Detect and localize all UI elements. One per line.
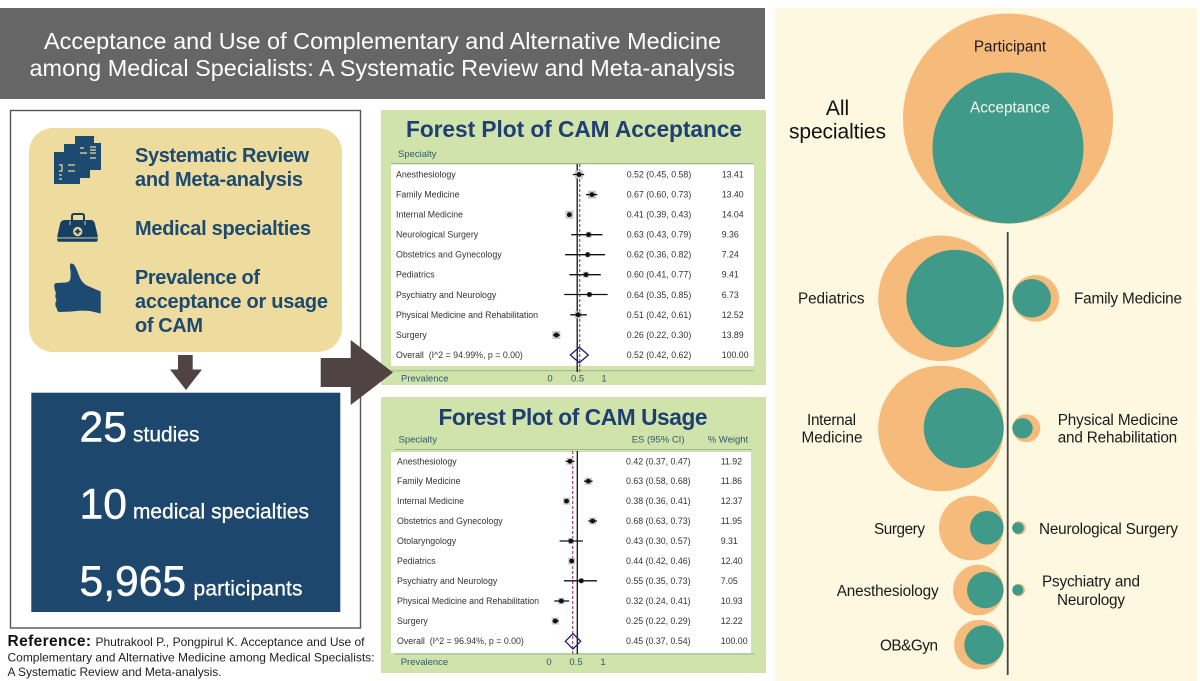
row: Anesthesiology: [397, 456, 742, 466]
row: Overall: [397, 634, 748, 649]
chart: psychiatry and neurology: Neurology: [1057, 592, 1125, 609]
row: Overall: Overall (I^2 = 96.94%, p = 0.00): [397, 636, 524, 646]
row: Psychiatry and Neurology: 6.73: [722, 290, 739, 300]
chart: psychiatry and neurology: [1012, 574, 1140, 609]
row: Obstetrics and Gynecology: [396, 250, 739, 260]
row: Overall: 100.00: [721, 636, 748, 646]
row: Obstetrics and Gynecology: 11.95: [721, 516, 742, 526]
row: Pediatrics: 0.44 (0.42, 0.46): [626, 556, 691, 566]
row: Overall: 100.00: [722, 350, 749, 360]
chart: obstetrics and gynecology: OB&Gyn: [880, 638, 938, 655]
row: Family Medicine: 0.63 (0.58, 0.68): [626, 476, 691, 486]
row: Internal Medicine: 12.37: [721, 496, 743, 506]
row: Anesthesiology: [396, 170, 744, 180]
reference lines: [577, 164, 580, 372]
chart: psychiatry and neurology: Psychiatry and: [1042, 574, 1140, 591]
stat: studies: studies: [133, 424, 200, 447]
row: Anesthesiology: Anesthesiology: [396, 170, 456, 180]
chart: all specialties: Acceptance: [970, 100, 1050, 117]
row: Anesthesiology: 11.92: [721, 456, 742, 466]
chart: internal medicine: [802, 366, 1004, 491]
chart: physical medicine and rehabilitation: [1012, 412, 1178, 446]
panel: forest plot of CAM acceptance: [381, 110, 766, 385]
row: Internal Medicine: 0.38 (0.36, 0.41): [626, 496, 691, 506]
icon: thumbs up: [54, 263, 101, 314]
row: Family Medicine: Family Medicine: [396, 190, 460, 200]
axis: prevalence: Prevalence: [401, 657, 448, 668]
row: Physical Medicine and Rehabilitation: 0.32 (0.24, 0.41): [626, 596, 691, 606]
row: Physical Medicine and Rehabilitation: 0.51 (0.42, 0.61): [627, 310, 691, 320]
row: Psychiatry and Neurology: 0.55 (0.35, 0.73): [626, 576, 691, 586]
chart: all specialties: Participant: [974, 39, 1047, 56]
divider: [1007, 232, 1009, 675]
chart: neurological surgery: Neurological Surgery: [1039, 521, 1178, 538]
row: Psychiatry and Neurology: [397, 576, 738, 586]
row: Family Medicine: Family Medicine: [397, 476, 461, 486]
chart: family medicine: [1012, 275, 1182, 322]
row: Physical Medicine and Rehabilitation: Physical Medicine and Rehabilitation: [397, 596, 539, 606]
stat: participants: participants: [194, 578, 302, 601]
text: reference: [8, 633, 374, 679]
arrow: down to study counts: [170, 355, 202, 390]
chart: surgery: Surgery: [874, 521, 925, 538]
row: Pediatrics: Pediatrics: [396, 270, 435, 280]
axis: prevalence: 0: [546, 657, 552, 668]
row: Pediatrics: [396, 270, 739, 280]
column headers: Specialty: [398, 435, 437, 446]
row: Internal Medicine: 14.04: [722, 210, 744, 220]
row: Obstetrics and Gynecology: 0.62 (0.36, 0.82): [627, 250, 691, 260]
reference lines: [573, 451, 577, 654]
stat: medical specialties: 10: [80, 480, 127, 528]
axis: prevalence: 1: [600, 657, 606, 668]
row: Otolaryngology: Otolaryngology: [397, 536, 457, 546]
text: reference: Complementary and Alternative Medicine among Medical Specialists:: [8, 651, 374, 665]
stat: studies: [80, 404, 200, 452]
row: Internal Medicine: [396, 210, 744, 220]
row: Psychiatry and Neurology: [396, 290, 739, 300]
text: prevalence of acceptance or usage: Prevalence of: [135, 267, 260, 289]
row: Internal Medicine: Internal Medicine: [397, 496, 464, 506]
heading: usage: Forest Plot of CAM Usage: [438, 404, 708, 430]
row: Surgery: Surgery: [397, 616, 428, 626]
icon: documents: [54, 136, 101, 184]
axis: prevalence: [401, 374, 607, 385]
row: Otolaryngology: 9.31: [721, 536, 738, 546]
stat: participants: [80, 558, 302, 606]
text: systematic review: [135, 145, 309, 191]
row: Physical Medicine and Rehabilitation: Physical Medicine and Rehabilitation: [396, 310, 538, 320]
chart: all specialties: [903, 14, 1113, 224]
panel: proportional circles: [775, 8, 1197, 681]
row: Otolaryngology: [397, 536, 738, 546]
row: Anesthesiology: 0.52 (0.45, 0.58): [627, 170, 691, 180]
axis: prevalence: 0.5: [571, 374, 584, 385]
row: Overall: Overall (I^2 = 94.99%, p = 0.00): [396, 350, 523, 360]
panel: forest plot of CAM usage: [381, 397, 766, 673]
row: Overall: 0.52 (0.42, 0.62): [627, 350, 691, 360]
text: prevalence of acceptance or usage: of CAM: [135, 315, 203, 337]
row: Surgery: 12.22: [721, 616, 743, 626]
title banner: Acceptance and Use of Complementary and Alternative Medicine: [44, 28, 721, 54]
panel: study overview: [10, 110, 360, 628]
text: medical specialties: Medical specialties: [135, 218, 311, 240]
row: Psychiatry and Neurology: 7.05: [721, 576, 738, 586]
text: reference: Reference:: [8, 633, 91, 650]
chart: obstetrics and gynecology: [880, 620, 1004, 670]
row: Family Medicine: [396, 190, 744, 200]
row: Physical Medicine and Rehabilitation: [396, 310, 744, 320]
axis: prevalence: 1: [601, 374, 607, 385]
text: systematic review: and Meta-analysis: [135, 169, 303, 191]
chart: anesthesiology: [837, 565, 1004, 615]
row: Surgery: 0.26 (0.22, 0.30): [627, 330, 691, 340]
column headers: ES (95% CI): [632, 435, 684, 446]
row: Overall: [396, 347, 749, 363]
text: reference: Phutrakool P., Pongpirul K. Acceptance and Use of: [96, 635, 365, 649]
row: Anesthesiology: 0.42 (0.37, 0.47): [626, 456, 691, 466]
row: Obstetrics and Gynecology: 0.68 (0.63, 0.73): [626, 516, 691, 526]
row: Neurological Surgery: Neurological Surgery: [396, 230, 479, 240]
text: systematic review: Systematic Review: [135, 145, 309, 167]
row: Surgery: 0.25 (0.22, 0.29): [626, 616, 691, 626]
arrow: overview to forest plots: [321, 340, 393, 405]
chart: pediatrics: Pediatrics: [798, 291, 865, 308]
chart: internal medicine: Internal: [807, 412, 856, 429]
row: Physical Medicine and Rehabilitation: [397, 596, 743, 606]
row: Physical Medicine and Rehabilitation: 12.52: [722, 310, 744, 320]
row: Surgery: 13.89: [722, 330, 744, 340]
row: Family Medicine: 0.67 (0.60, 0.73): [627, 190, 691, 200]
column header: Specialty: [398, 149, 437, 160]
row: Obstetrics and Gynecology: Obstetrics and Gynecology: [397, 516, 503, 526]
row: Obstetrics and Gynecology: 7.24: [722, 250, 739, 260]
chart: surgery: [874, 496, 1004, 560]
row: Pediatrics: 9.41: [722, 270, 739, 280]
stat: medical specialties: [80, 480, 309, 528]
icon: medical bag: [57, 214, 98, 242]
row: Neurological Surgery: [396, 230, 739, 240]
text: prevalence of acceptance or usage: [135, 267, 328, 337]
row: Internal Medicine: Internal Medicine: [396, 210, 463, 220]
row: Pediatrics: [397, 556, 743, 566]
axis: prevalence: 0.5: [569, 657, 583, 668]
row: Pediatrics: Pediatrics: [397, 556, 436, 566]
row: Surgery: [397, 616, 743, 626]
row: Physical Medicine and Rehabilitation: 10.93: [721, 596, 743, 606]
row: Obstetrics and Gynecology: [397, 516, 742, 526]
row: Otolaryngology: 0.43 (0.30, 0.57): [626, 536, 691, 546]
stat: medical specialties: medical specialties: [133, 500, 309, 523]
stat: participants: 5,965: [80, 558, 186, 606]
row: Internal Medicine: [397, 496, 743, 506]
text: reference: A Systematic Review and Meta-analysis.: [8, 665, 222, 679]
row: Internal Medicine: 0.41 (0.39, 0.43): [627, 210, 691, 220]
row: Psychiatry and Neurology: Psychiatry and Neurology: [397, 576, 498, 586]
chart: internal medicine: Medicine: [802, 429, 862, 446]
row: Pediatrics: 0.60 (0.41, 0.77): [627, 270, 691, 280]
row: Psychiatry and Neurology: 0.64 (0.35, 0.85): [627, 290, 691, 300]
title banner: among Medical Specialists: A Systematic Review and Meta-analysis: [30, 55, 735, 81]
row: Family Medicine: [397, 476, 742, 486]
row: Surgery: Surgery: [396, 330, 427, 340]
chart: physical medicine and rehabilitation: and Rehabilitation: [1058, 429, 1177, 446]
title banner: [0, 8, 765, 99]
text: prevalence of acceptance or usage: acceptance or usage: [135, 291, 328, 313]
axis: prevalence: [401, 657, 606, 668]
label: all specialties: All: [826, 97, 849, 120]
axis: prevalence: 0: [547, 374, 553, 385]
chart: physical medicine and rehabilitation: Physical Medicine: [1058, 412, 1178, 429]
row: Psychiatry and Neurology: Psychiatry and Neurology: [396, 290, 497, 300]
label: all specialties: specialties: [789, 121, 886, 144]
panel: study counts: [31, 393, 340, 612]
row: Family Medicine: 13.40: [722, 190, 744, 200]
label: all specialties: [789, 97, 886, 144]
chart: pediatrics: [798, 235, 1004, 361]
row: Overall: 0.45 (0.37, 0.54): [626, 636, 691, 646]
row: Obstetrics and Gynecology: Obstetrics and Gynecology: [396, 250, 502, 260]
column headers: [398, 435, 749, 446]
chart: anesthesiology: Anesthesiology: [837, 583, 939, 600]
stat: studies: 25: [80, 404, 127, 452]
row: Surgery: [396, 330, 744, 340]
heading: acceptance: Forest Plot of CAM Acceptance: [406, 116, 742, 142]
column headers: % Weight: [708, 435, 749, 446]
row: Anesthesiology: 13.41: [722, 170, 744, 180]
row: Neurological Surgery: 9.36: [722, 230, 739, 240]
panel: review scope: [29, 128, 342, 352]
row: Pediatrics: 12.40: [721, 556, 743, 566]
axis: prevalence: Prevalence: [401, 374, 449, 385]
row: Neurological Surgery: 0.63 (0.43, 0.79): [627, 230, 691, 240]
chart: family medicine: Family Medicine: [1074, 291, 1182, 308]
row: Family Medicine: 11.86: [721, 476, 742, 486]
row: Anesthesiology: Anesthesiology: [397, 456, 457, 466]
